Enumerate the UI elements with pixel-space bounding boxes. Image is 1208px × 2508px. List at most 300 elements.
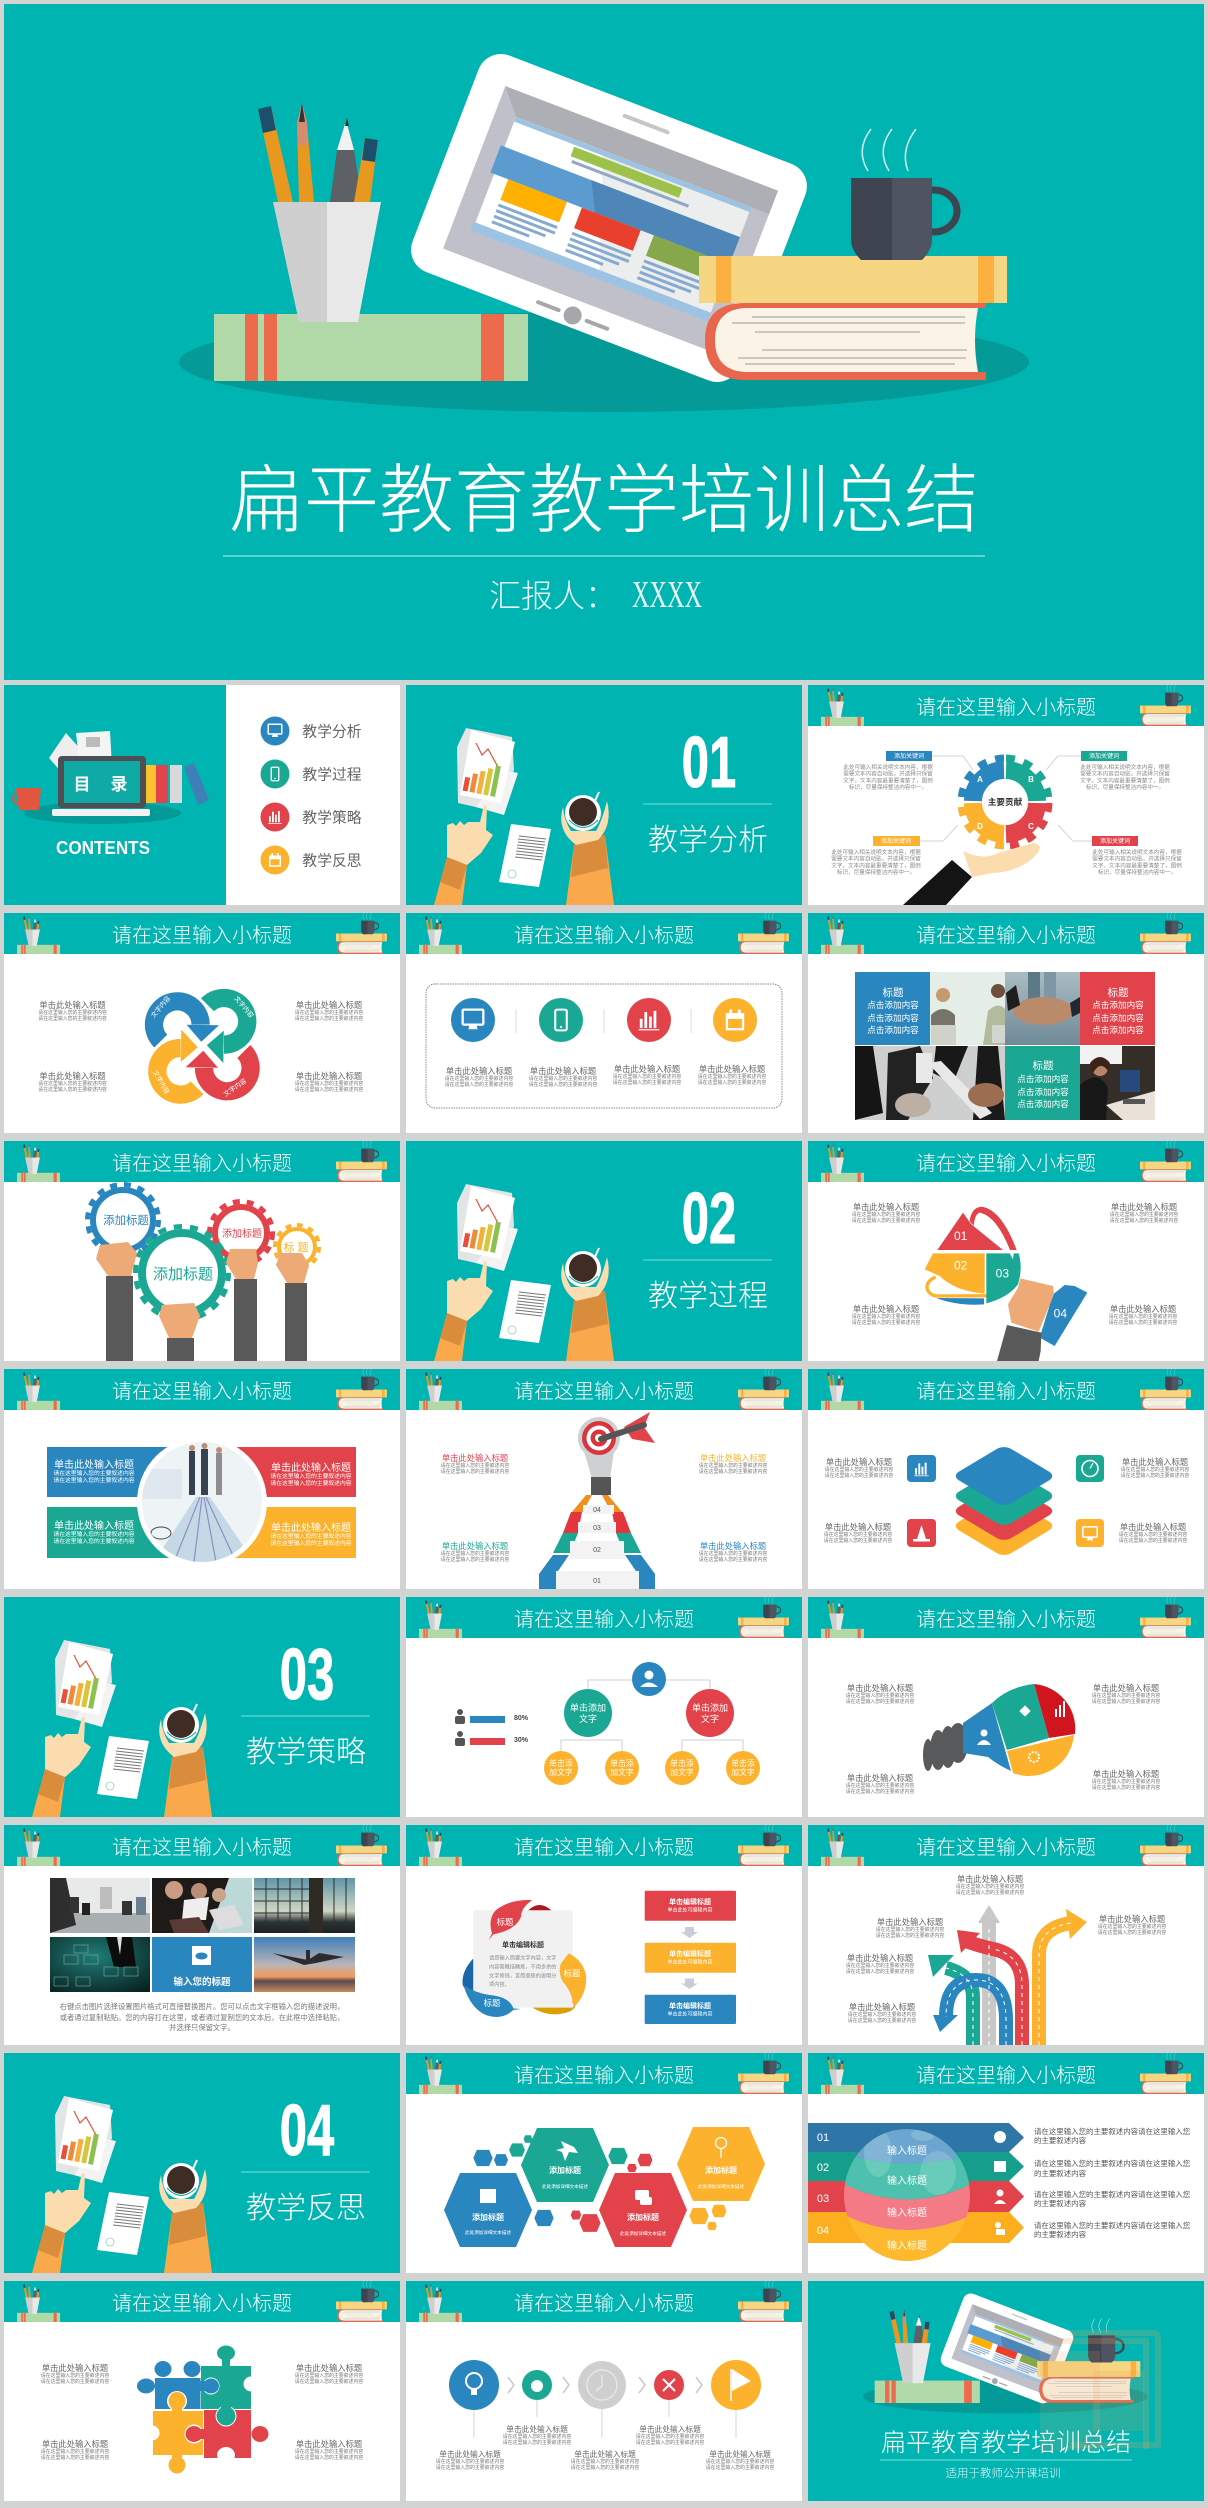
banner backgrounds (47, 1447, 356, 1558)
panel: staircase to target (406, 1369, 802, 1589)
text block: 请在这里输入您的主要叙述内容 (503, 2439, 571, 2446)
text block: 请在这里输入您的主要叙述内容 (295, 1080, 363, 1087)
node: red: 文字 (701, 1713, 719, 1724)
text block (41, 2363, 109, 2385)
label: red keyword (1092, 836, 1138, 846)
text block: 单击此处输入标题 (614, 1064, 680, 1074)
header band (808, 685, 1204, 726)
text block: yellow title: 单击此处输入标题 (700, 1453, 766, 1463)
text block: teal title: 请在这里输入您的主要叙述内容 (441, 1556, 509, 1563)
globe labels: 输入标题 (887, 2239, 927, 2252)
text block: yellow title (699, 1453, 767, 1475)
text block: 请在这里输入您的主要叙述内容 (846, 1788, 914, 1795)
text block (698, 1064, 766, 1086)
text: teal banner: 请在这里输入您的主要叙述内容 (53, 1537, 135, 1545)
icon: black sleeve (903, 860, 972, 905)
section title: 教学反思 (246, 2192, 366, 2225)
paragraph: 右键点击图片选择设置图片格式可直接替换图片。您可以点击文字框输入您的描述说明， (60, 2002, 344, 2011)
icon tile: yellow (1076, 1519, 1104, 1547)
chart: interlocking arrow rings: 文字内容 (232, 994, 256, 1020)
text block (846, 1953, 914, 1975)
caption: blue: 标题 (882, 987, 904, 999)
node: yellow 3: 加文字 (670, 1767, 694, 1777)
text block: teal title: 请在这里输入您的主要叙述内容 (441, 1550, 509, 1557)
text block: 请在这里输入您的主要叙述内容 (436, 2464, 504, 2471)
header band (406, 1369, 802, 1410)
text block: 单击此处输入标题 (39, 1000, 106, 1010)
text block: 单击此处输入标题 (1099, 1914, 1165, 1924)
tile: blue title with cloud icon: 输入您的标题 (173, 1976, 231, 1988)
icon: calendar (713, 998, 757, 1042)
blue card 04 (1040, 1285, 1087, 1346)
text block: top left (843, 763, 933, 791)
panel: section 02 (406, 1141, 802, 1361)
text block: bottom left: 文字。文本内容最重要清楚了，图例 (831, 861, 921, 869)
chart: four-part gear: D (977, 822, 983, 831)
small hexagons (473, 2135, 726, 2232)
text block (636, 2424, 704, 2446)
text block: teal title: 单击此处输入标题 (442, 1541, 508, 1551)
text block: 单击此处输入标题 (853, 1202, 919, 1212)
band numbers (817, 2132, 829, 2237)
chart: cup segments: 02 (954, 1258, 968, 1272)
text block: 请在这里输入您的主要叙述内容 (846, 1782, 914, 1789)
item: 教学分析: 教学分析 (302, 724, 362, 740)
header band (406, 1825, 802, 1866)
text block (38, 1071, 107, 1093)
text block: 请在这里输入您的主要叙述内容 (38, 1009, 107, 1016)
section title: 教学过程 (648, 1280, 768, 1313)
caption: teal (1005, 1046, 1080, 1120)
description 3: 请在这里输入您的主要叙述内容请在这里输入您 (1034, 2189, 1191, 2199)
header band (808, 1141, 1204, 1182)
hexagon: blue: 添加标题 (472, 2212, 504, 2222)
text block (876, 1917, 944, 1939)
header band: 请在这里输入小标题 (916, 1152, 1096, 1175)
panel: section 04 (4, 2053, 400, 2273)
header band: 请在这里输入小标题 (916, 924, 1096, 947)
text: yellow banner (270, 1521, 352, 1547)
item: 教学过程: 教学过程 (302, 766, 362, 784)
globe labels: 输入标题 (887, 2206, 927, 2219)
text: teal banner (53, 1519, 135, 1545)
caption: red: 点击添加内容 (1092, 999, 1144, 1010)
header band: 请在这里输入小标题 (916, 1380, 1096, 1403)
band numbers: 03 (817, 2193, 829, 2205)
text block: 请在这里输入您的主要叙述内容 (1092, 1784, 1160, 1791)
text block: 请在这里输入您的主要叙述内容 (846, 1692, 914, 1699)
panel: hexagons (406, 2053, 802, 2273)
chart: stair steps: 01 (593, 1578, 601, 1585)
text block: 请在这里输入您的主要叙述内容 (852, 1313, 920, 1320)
caption: teal: 标题 (1032, 1060, 1054, 1072)
header band: 请在这里输入小标题 (514, 1380, 694, 1403)
chart: four-part gear: C (1028, 822, 1034, 831)
text block: 单击此处输入标题 (42, 2363, 108, 2373)
illustration: hands with papers and coffee (434, 1184, 614, 1361)
presenter line: XXXX (632, 574, 702, 616)
text block (38, 1000, 107, 1022)
illustration: hands with papers and coffee (32, 2096, 212, 2273)
header band: 请在这里输入小标题 (916, 2064, 1096, 2087)
text block: 请在这里输入您的主要叙述内容 (295, 1009, 363, 1016)
text card: 文字修饰，言简意赅的说明分 (489, 1972, 556, 1980)
text block: 请在这里输入您的主要叙述内容 (846, 1962, 914, 1969)
text: yellow banner: 单击此处输入标题 (271, 1521, 351, 1534)
process box: red (645, 1891, 736, 1921)
panel: organisation tree (406, 1597, 802, 1817)
text block: blue title: 单击此处输入标题 (700, 1541, 766, 1551)
text block: 请在这里输入您的主要叙述内容 (852, 1211, 920, 1218)
text block (529, 1066, 597, 1088)
text block: bottom left (831, 848, 921, 876)
text: teal banner: 单击此处输入标题 (54, 1519, 134, 1532)
hexagon: red: 此处添加详细文本描述 (620, 2230, 666, 2237)
text block: 单击此处输入标题 (446, 1066, 512, 1076)
description 1: 的主要叙述内容 (1034, 2135, 1087, 2145)
text block: 请在这里输入您的主要叙述内容 (41, 2378, 109, 2385)
photo: woman on telephone (1080, 1046, 1155, 1120)
text block: bottom right: 此处可输入相关说明文本内容，根据 (1092, 848, 1182, 856)
icon tile: red (907, 1519, 936, 1547)
section title: 教学分析 (648, 824, 768, 857)
text block: 请在这里输入您的主要叙述内容 (1098, 1929, 1166, 1936)
caption: teal: 点击添加内容 (1017, 1073, 1069, 1084)
node: yellow 3 (665, 1751, 699, 1785)
text block (503, 2424, 571, 2446)
chart: globe (844, 2129, 970, 2261)
caption: blue (855, 972, 930, 1045)
chart: stair steps: 03 (593, 1525, 601, 1532)
icon: bulb circle (449, 2360, 499, 2410)
text block: 单击此处输入标题 (1093, 1683, 1159, 1693)
chart: stacked diamonds (952, 1445, 1056, 1557)
gear: yellow (275, 1225, 319, 1269)
text block: yellow title: 请在这里输入您的主要叙述内容 (699, 1468, 767, 1475)
text block: 单击此处输入标题 (39, 1071, 106, 1081)
stat: 30%: 30% (514, 1737, 529, 1744)
hexagon: blue: 此处添加详细文本描述 (465, 2229, 511, 2236)
chart: interlocking arrow rings: 文字内容 (149, 993, 173, 1020)
header band: 请在这里输入小标题 (112, 924, 292, 947)
text block: 请在这里输入您的主要叙述内容 (1092, 1778, 1160, 1785)
text block: 请在这里输入您的主要叙述内容 (825, 1472, 893, 1479)
text block (295, 1000, 363, 1022)
label: yellow keyword (873, 836, 920, 846)
node: yellow 1 (544, 1751, 578, 1785)
text block (571, 2449, 639, 2471)
description 4: 的主要叙述内容 (1034, 2229, 1087, 2239)
description 4: 请在这里输入您的主要叙述内容请在这里输入您 (1034, 2220, 1191, 2230)
arrow (681, 1978, 698, 1989)
gear: red (210, 1202, 272, 1264)
item: 教学反思: 教学反思 (302, 852, 362, 870)
text block (1119, 1522, 1187, 1544)
text block: 请在这里输入您的主要叙述内容 (698, 1073, 766, 1080)
hexagon: red: 添加标题 (627, 2212, 659, 2222)
hexagon: red (599, 2173, 687, 2247)
description 3 (1034, 2189, 1191, 2208)
header band (4, 1369, 400, 1410)
text: blue banner (53, 1458, 135, 1484)
globe labels: 输入标题 (887, 2174, 927, 2187)
panel: photo grid with colored captions (808, 913, 1204, 1133)
text block: 请在这里输入您的主要叙述内容 (1098, 1923, 1166, 1930)
text block (1109, 1304, 1177, 1326)
text block: 请在这里输入您的主要叙述内容 (38, 1015, 107, 1022)
text block: 单击此处输入标题 (1111, 1202, 1177, 1212)
chart: puzzle pieces (137, 2346, 268, 2474)
arms and hands (96, 1242, 309, 1361)
text block: top left: 文字。文本内容最重要清楚了，图例 (843, 776, 933, 784)
text block: 请在这里输入您的主要叙述内容 (1121, 1466, 1189, 1473)
closing title: 扁平教育教学培训总结 (881, 2429, 1131, 2457)
text block: 单击此处输入标题 (1110, 1304, 1176, 1314)
node: top person (632, 1662, 666, 1696)
tile: blue title with cloud icon (152, 1937, 252, 1992)
process box: yellow: 单击此处可编辑内容 (667, 1958, 713, 1966)
photo: team at laptop (152, 1878, 252, 1933)
node: yellow 2: 单击添 (610, 1758, 634, 1768)
band icons (994, 2131, 1006, 2235)
photo: signing a document (855, 1046, 1005, 1120)
text block: top right: 需要文本内容自动贴，并选择只保留 (1080, 770, 1170, 778)
icon: phone (539, 998, 583, 1042)
text: yellow banner: 请在这里输入您的主要叙述内容 (270, 1532, 352, 1540)
text card: 单击编辑标题 (502, 1940, 544, 1949)
text block: 请在这里输入您的主要叙述内容 (824, 1531, 892, 1538)
text block: top right (1080, 763, 1170, 791)
text block: red title: 请在这里输入您的主要叙述内容 (441, 1462, 509, 1469)
text block (848, 2002, 916, 2024)
node: yellow 4: 单击添 (731, 1758, 755, 1768)
chart: interlocking arrow rings (149, 993, 256, 1098)
hexagon: blue (444, 2173, 532, 2247)
chart: five roads (928, 1905, 1087, 2045)
globe labels: 输入标题 (887, 2144, 927, 2157)
text block: 请在这里输入您的主要叙述内容 (445, 1081, 513, 1088)
panel: closing slide (808, 2281, 1204, 2501)
text: red banner: 单击此处输入标题 (271, 1461, 351, 1474)
panel: leaf card and process boxes (406, 1825, 802, 2045)
leaf: red: 标题 (497, 1917, 514, 1927)
text block: 单击此处输入标题 (847, 1683, 913, 1693)
text block (436, 2449, 504, 2471)
text block (295, 1071, 363, 1093)
header band: 请在这里输入小标题 (112, 1152, 292, 1175)
text block: 请在这里输入您的主要叙述内容 (1119, 1531, 1187, 1538)
text block: top left: 标识，尽量保持整洁内容中一。 (849, 783, 927, 791)
text block: 请在这里输入您的主要叙述内容 (1110, 1211, 1178, 1218)
chart: stair steps: 02 (593, 1547, 601, 1554)
header band: 请在这里输入小标题 (514, 1836, 694, 1859)
connector lines (920, 756, 1092, 841)
stat: 80%: 80% (514, 1715, 529, 1722)
header band (808, 2053, 1204, 2094)
description 3: 的主要叙述内容 (1034, 2198, 1087, 2208)
header band: 请在这里输入小标题 (916, 696, 1096, 719)
text block: 请在这里输入您的主要叙述内容 (636, 2433, 704, 2440)
text block (1121, 1457, 1189, 1479)
tab: red over yellow (184, 2424, 206, 2444)
text block: 单击此处输入标题 (1093, 1769, 1159, 1779)
item: 教学反思 (260, 846, 362, 874)
leaf: yellow (560, 1947, 586, 2006)
photo: man drawing chart (50, 1937, 150, 1992)
text block: 单击此处输入标题 (699, 1064, 765, 1074)
chart: four-part gear: B (1028, 775, 1034, 784)
header band: 请在这里输入小标题 (112, 1836, 292, 1859)
presenter line (489, 574, 702, 616)
text block: red title: 单击此处输入标题 (442, 1453, 508, 1463)
main title: 扁平教育教学培训总结 (229, 458, 979, 542)
text block (706, 2449, 774, 2471)
illustration: desk with tablet, books, pencils and mug (863, 2291, 1148, 2413)
text card: 项内容。 (489, 1980, 510, 1988)
process box: red: 单击此处可编辑内容 (667, 1906, 713, 1914)
node: red: 单击添加 (692, 1702, 728, 1713)
chart: interlocking arrow rings: 文字内容 (222, 1076, 249, 1098)
leaf: red (489, 1900, 532, 1940)
text block: red title (441, 1453, 509, 1475)
text block: red title: 请在这里输入您的主要叙述内容 (441, 1468, 509, 1475)
header band (406, 2053, 802, 2094)
section number: 01 (682, 723, 736, 803)
band numbers: 01 (817, 2132, 829, 2144)
text: blue banner: 请在这里输入您的主要叙述内容 (53, 1469, 135, 1477)
piece: blue (137, 2361, 220, 2409)
chevrons (508, 2377, 702, 2393)
illustration: hands with papers and coffee (32, 1640, 212, 1817)
text block: 请在这里输入您的主要叙述内容 (295, 2378, 363, 2385)
caption: teal: 点击添加内容 (1017, 1098, 1069, 1109)
dotted frame (426, 984, 782, 1108)
text block: top right: 此处可输入相关说明文本内容，根据 (1080, 763, 1170, 771)
section number: 03 (280, 1635, 334, 1715)
stat: 80% (455, 1709, 529, 1724)
text block: yellow title: 请在这里输入您的主要叙述内容 (699, 1462, 767, 1469)
gear: teal: 添加标题 (153, 1266, 213, 1283)
text block: 请在这里输入您的主要叙述内容 (613, 1073, 681, 1080)
description 4 (1034, 2220, 1191, 2239)
text block (41, 2439, 109, 2461)
label: teal keyword: 添加关键词 (1089, 752, 1119, 760)
node: yellow 2 (605, 1751, 639, 1785)
text block: 请在这里输入您的主要叙述内容 (41, 2448, 109, 2455)
chart: cup segments: 03 (996, 1267, 1009, 1281)
text block: 请在这里输入您的主要叙述内容 (1119, 1537, 1187, 1544)
blue card 04: 04 (1054, 1307, 1067, 1321)
hexagon: yellow: 添加标题 (705, 2165, 737, 2175)
text block: teal title (441, 1541, 509, 1563)
text block: top right: 文字。文本内容最重要清楚了，图例 (1080, 776, 1170, 784)
text block (1092, 1683, 1160, 1705)
gear: blue (88, 1184, 158, 1256)
caption: teal: 点击添加内容 (1017, 1086, 1069, 1097)
process box: blue: 单击编辑标题 (669, 2001, 711, 2010)
panel: stacked layers (808, 1369, 1204, 1589)
text block: 请在这里输入您的主要叙述内容 (295, 1086, 363, 1093)
text block: top left: 需要文本内容自动贴，并选择只保留 (843, 770, 933, 778)
illustration: laptop with books: 目 (74, 775, 90, 794)
gear: teal (136, 1226, 228, 1320)
photo: round business team (142, 1442, 262, 1562)
text block: 单击此处输入标题 (709, 2449, 771, 2459)
icon: hand under gear (963, 843, 1040, 877)
text block: 请在这里输入您的主要叙述内容 (956, 1883, 1024, 1890)
text block: 请在这里输入您的主要叙述内容 (613, 1079, 681, 1086)
text card (473, 1910, 573, 2008)
paragraph: 或者通过复制粘贴。您的内容打在这里，或者通过复制您的文本后，在此框中选择粘贴， (60, 2013, 344, 2022)
header band (406, 2281, 802, 2322)
text block: 单击此处输入标题 (296, 2439, 362, 2449)
label: blue keyword (886, 751, 932, 761)
header band (808, 1369, 1204, 1410)
text block: 请在这里输入您的主要叙述内容 (571, 2458, 639, 2465)
arrow (681, 1927, 698, 1938)
process box: blue: 单击此处可编辑内容 (667, 2010, 713, 2018)
leaf shadows behind card (462, 1905, 577, 2014)
text block: 请在这里输入您的主要叙述内容 (706, 2458, 774, 2465)
text block: 单击此处输入标题 (877, 1917, 943, 1927)
text block (295, 2439, 363, 2461)
panel: globe with four bands (808, 2053, 1204, 2273)
caption: red: 点击添加内容 (1092, 1024, 1144, 1035)
text block: 单击此处输入标题 (42, 2439, 108, 2449)
icon: target with arrow (578, 1412, 655, 1495)
globe labels (887, 2144, 927, 2252)
text block: 请在这里输入您的主要叙述内容 (1109, 1319, 1177, 1326)
text block: 请在这里输入您的主要叙述内容 (41, 2454, 109, 2461)
piece: red (185, 2410, 268, 2463)
panel: four icons in dotted frame (406, 913, 802, 1133)
header band (4, 1141, 400, 1182)
stat: 30% (455, 1731, 529, 1746)
header band: 请在这里输入小标题 (514, 2292, 694, 2315)
panel: section 03 (4, 1597, 400, 1817)
chart: cup segments (925, 1207, 1021, 1305)
text block: bottom left: 此处可输入相关说明文本内容，根据 (831, 848, 921, 856)
description 1 (1034, 2126, 1191, 2145)
node: teal (564, 1689, 612, 1737)
hexagon: teal (521, 2128, 609, 2202)
text: red banner: 请在这里输入您的主要叙述内容 (270, 1479, 352, 1487)
text block (1092, 1769, 1160, 1791)
chart: stair steps (539, 1495, 655, 1589)
gear: red: 添加标题 (222, 1227, 262, 1240)
panel: gear with four keywords (808, 685, 1204, 905)
caption: blue: 点击添加内容 (867, 999, 919, 1010)
label: red keyword: 添加关键词 (1100, 837, 1130, 845)
text block: blue title: 请在这里输入您的主要叙述内容 (699, 1550, 767, 1557)
text block: 请在这里输入您的主要叙述内容 (436, 2458, 504, 2465)
text: yellow banner: 请在这里输入您的主要叙述内容 (270, 1539, 352, 1547)
process box: yellow: 单击编辑标题 (669, 1949, 711, 1958)
icon tile: blue (907, 1455, 936, 1482)
panel: contents slide (4, 685, 400, 905)
text block: 单击此处输入标题 (574, 2449, 636, 2459)
text: red banner: 请在这里输入您的主要叙述内容 (270, 1472, 352, 1480)
text block: 请在这里输入您的主要叙述内容 (571, 2464, 639, 2471)
text block: 请在这里输入您的主要叙述内容 (852, 1319, 920, 1326)
text block: 请在这里输入您的主要叙述内容 (846, 1698, 914, 1705)
text block: 单击此处输入标题 (296, 1000, 362, 1010)
text block: 请在这里输入您的主要叙述内容 (848, 2011, 916, 2018)
panel: jigsaw puzzle (4, 2281, 400, 2501)
text block: 单击此处输入标题 (1122, 1457, 1188, 1467)
text block: 单击此处输入标题 (530, 1066, 596, 1076)
panel: hands holding gears (4, 1141, 400, 1361)
